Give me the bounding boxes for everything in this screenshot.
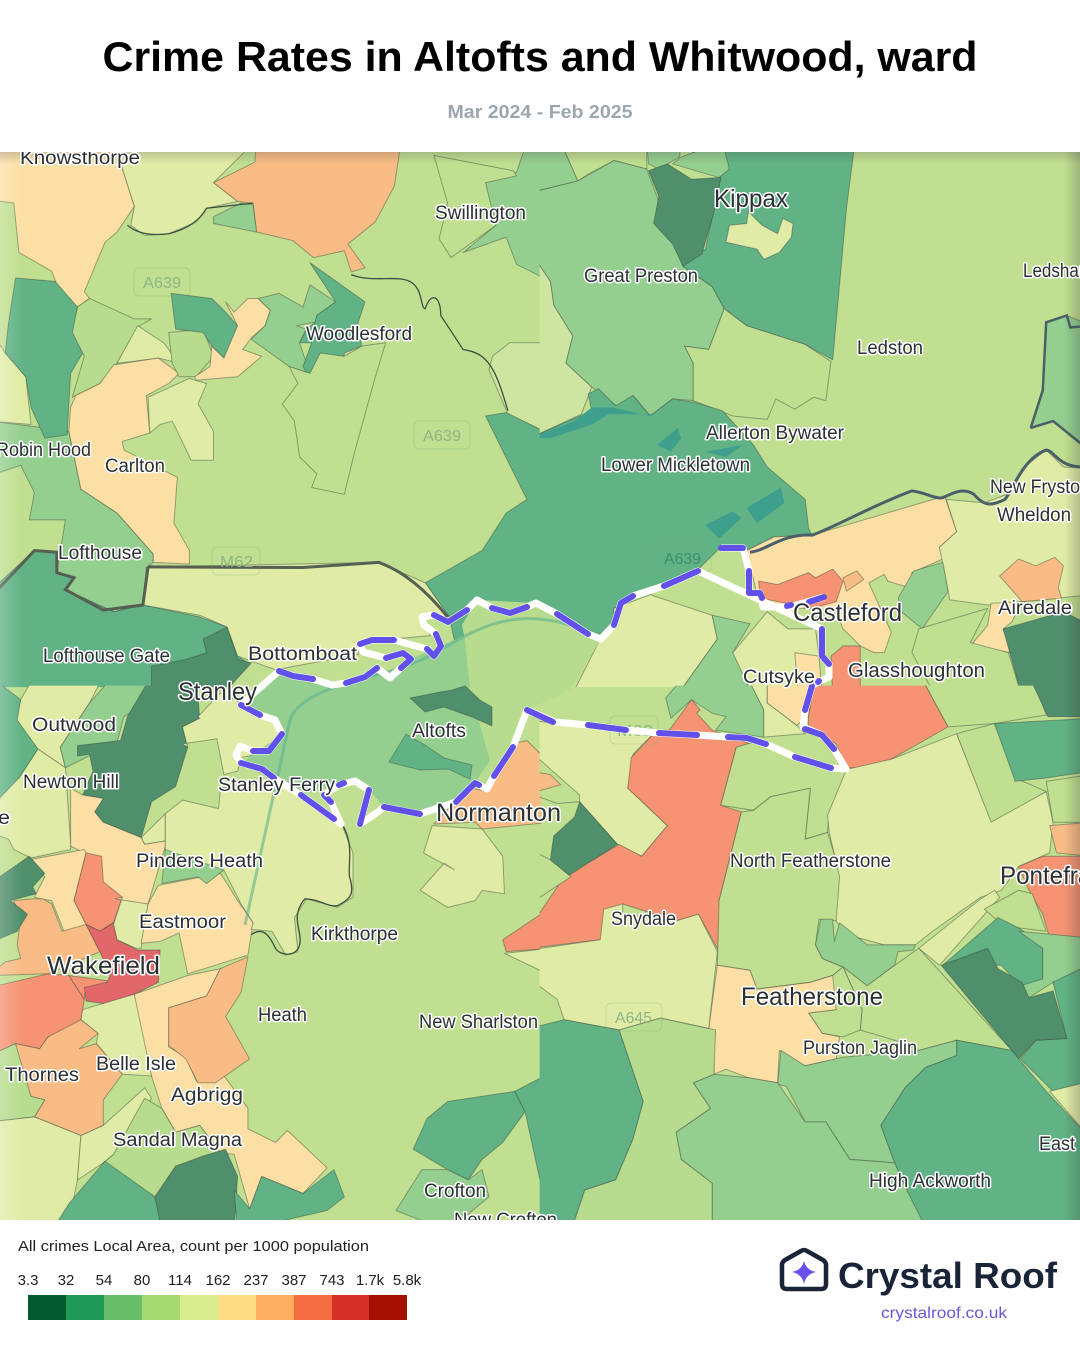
label: Stanley: Stanley <box>178 678 257 706</box>
label: Eastmoor: Eastmoor <box>139 912 227 933</box>
label: Agbrigg: Agbrigg <box>171 1085 243 1106</box>
label: High Ackworth: High Ackworth <box>869 1171 991 1192</box>
label: Woodlesford: Woodlesford <box>306 324 412 345</box>
road labels: A639 <box>423 428 461 445</box>
choropleth areas: north-east <box>530 142 1080 697</box>
legend colour ramp <box>28 1295 407 1320</box>
label: Glasshoughton: Glasshoughton <box>848 660 985 682</box>
subtitle: date range: Mar 2024 - Feb 2025 <box>448 102 632 122</box>
legend scale labels: 114 <box>168 1272 192 1289</box>
road labels <box>134 268 711 1031</box>
label: Lofthouse Gate: Lofthouse Gate <box>43 646 170 667</box>
label: Bottomboat: Bottomboat <box>248 644 358 665</box>
legend scale labels: 80 <box>134 1272 150 1289</box>
title: Crime Rates in Altofts and Whitwood, ward <box>102 33 978 80</box>
label: Kirkthorpe: Kirkthorpe <box>311 924 398 945</box>
label: Altofts: Altofts <box>412 721 466 742</box>
road labels: A639 <box>143 275 181 292</box>
label: Ledston: Ledston <box>857 338 923 359</box>
label: Stanley Ferry: Stanley Ferry <box>218 775 336 796</box>
label: Heath: Heath <box>258 1005 307 1026</box>
choropleth areas: south-west <box>0 676 551 1231</box>
legend scale labels: 162 <box>205 1272 231 1289</box>
label: Carlton: Carlton <box>105 456 165 477</box>
rivers <box>245 619 600 925</box>
label: Knowsthorpe: Knowsthorpe <box>20 148 140 169</box>
logo icon: house with star <box>782 1250 826 1289</box>
label: Purston Jaglin: Purston Jaglin <box>803 1038 917 1059</box>
label: North Featherstone: North Featherstone <box>730 851 891 872</box>
legend scale labels: 3.3 <box>18 1272 38 1289</box>
label: Sandal Magna: Sandal Magna <box>113 1130 242 1151</box>
label: Allerton Bywater: Allerton Bywater <box>706 423 845 444</box>
label: Wheldon: Wheldon <box>997 505 1071 526</box>
label: Cutsyke: Cutsyke <box>743 667 815 688</box>
road labels: M62 <box>617 723 653 740</box>
label: New Sharlston: New Sharlston <box>419 1012 538 1033</box>
label: Belle Isle: Belle Isle <box>96 1054 176 1075</box>
label: Airedale: Airedale <box>998 598 1072 619</box>
legend scale labels: 1.7k <box>356 1272 385 1289</box>
legend scale labels: 387 <box>281 1272 307 1289</box>
label: Lower Mickletown: Lower Mickletown <box>601 455 750 476</box>
label: Wakefield: Wakefield <box>47 952 160 980</box>
label: Lofthouse: Lofthouse <box>58 543 142 564</box>
legend scale labels <box>18 1272 422 1289</box>
map edge fade <box>0 152 1080 1220</box>
ward boundary: white outline and purple dashes <box>236 548 846 824</box>
label: Kippax: Kippax <box>714 185 788 213</box>
label: Snydale: Snydale <box>611 909 676 930</box>
choropleth areas: north-west <box>0 142 551 697</box>
label: Swillington: Swillington <box>435 203 526 224</box>
label: Featherstone: Featherstone <box>741 983 883 1011</box>
label: Castleford: Castleford <box>793 599 902 627</box>
logo wordmark: Crystal Roof <box>838 1255 1058 1296</box>
label: Crofton: Crofton <box>424 1181 486 1202</box>
legend scale labels: 54 <box>96 1272 112 1289</box>
road labels: M62 <box>220 554 253 571</box>
label: Newton Hill: Newton Hill <box>23 772 119 793</box>
ward fill: eastern part <box>462 600 601 789</box>
website link: crystalroof.co.uk <box>881 1305 1008 1322</box>
Altofts mid-green area <box>389 734 472 779</box>
label: East: East <box>1039 1134 1076 1155</box>
legend scale labels: 743 <box>319 1272 345 1289</box>
label: Outwood: Outwood <box>32 715 116 736</box>
ward fill: western part <box>241 635 490 814</box>
Altofts dark area <box>410 686 492 726</box>
road labels: A645 <box>615 1010 652 1027</box>
legend scale labels: 32 <box>58 1272 74 1289</box>
label: Normanton: Normanton <box>436 799 561 827</box>
label: Pinders Heath: Pinders Heath <box>136 851 263 872</box>
label: Thornes: Thornes <box>5 1065 79 1086</box>
choropleth areas: south-east <box>530 676 1080 1231</box>
legend scale labels: 5.8k <box>393 1272 422 1289</box>
road labels: A639 <box>664 551 701 568</box>
legend title: All crimes Local Area, count per 1000 population <box>18 1238 369 1255</box>
label: Great Preston: Great Preston <box>584 266 698 287</box>
legend scale labels: 237 <box>243 1272 269 1289</box>
label: New Crofton: New Crofton <box>454 1210 557 1231</box>
